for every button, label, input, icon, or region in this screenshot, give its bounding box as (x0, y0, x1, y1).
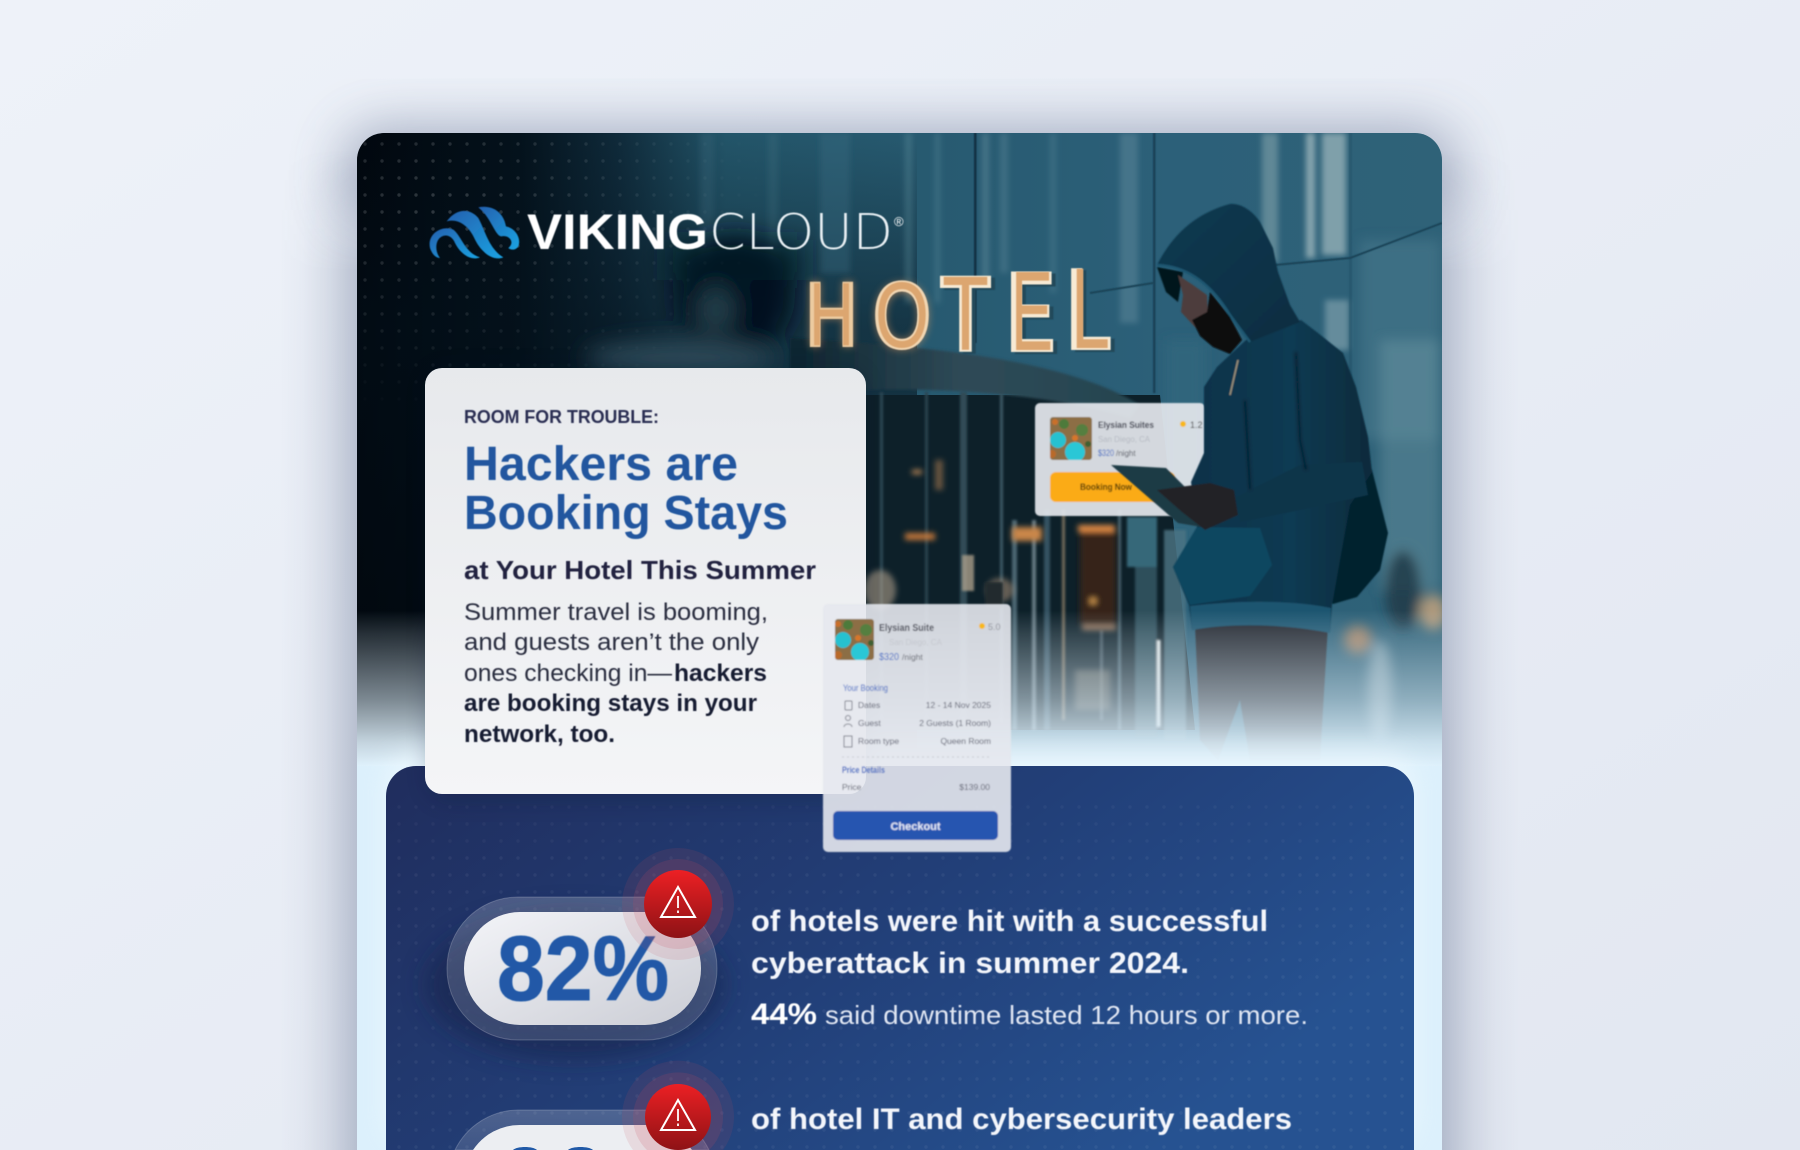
checkout booking card: 5.0 (988, 622, 1001, 632)
backpack (1332, 470, 1389, 605)
checkout booking card: Checkout (890, 821, 941, 833)
bottom fade of photo (357, 610, 1442, 766)
sign inner lines: L (1071, 245, 1110, 373)
glass facade streaks (700, 133, 1349, 350)
checkout booking card: 12 - 14 Nov 2025 (926, 700, 991, 710)
icon: alert (622, 848, 734, 960)
sign tubes: E (1006, 246, 1056, 377)
sign 3D sides (944, 270, 1115, 354)
hero photo: hotel entrance at night (357, 133, 1447, 1150)
small booking card behind hacker: Elysian Suites (1098, 420, 1154, 431)
small booking card behind hacker: $320 (1098, 448, 1114, 458)
sign 3D sides: E (1010, 248, 1060, 379)
small booking card behind hacker (1035, 403, 1205, 516)
body copy: ones checking in— (464, 660, 672, 687)
hotel thumbnail (1048, 417, 1092, 462)
stat: 82% (425, 848, 1308, 1060)
sleeve (1285, 462, 1368, 512)
neon HOTEL sign (804, 267, 1115, 355)
revolving door (864, 392, 1195, 740)
body copy: hackers (674, 660, 767, 687)
sign glow (804, 276, 934, 355)
sign tubes: H (805, 262, 858, 368)
brand logo (430, 204, 904, 261)
stat copy: of hotel IT and cybersecurity leaders (751, 1103, 1292, 1136)
checkout booking card: 2 Guests (1 Room) (919, 718, 991, 728)
legs (1194, 624, 1328, 742)
body copy (464, 599, 768, 748)
blurred passer-by silhouette (585, 233, 805, 374)
sign tubes: T (939, 253, 992, 376)
checkout booking card: $320 (879, 652, 899, 663)
wordmark: VIKING (527, 204, 708, 260)
checkout booking card: Queen Room (940, 736, 991, 746)
hooded hacker (1111, 204, 1388, 760)
card shadow: sides (280, 150, 1519, 1150)
sign inner lines: O (875, 263, 929, 367)
torso and arm (1173, 320, 1372, 632)
checkout booking card: Guest (858, 718, 881, 728)
sign glow: H (805, 261, 858, 368)
body copy: and guests aren’t the only (464, 629, 759, 656)
checkout booking card: Price (842, 782, 862, 792)
checkout booking card: /night (902, 652, 923, 662)
checkout booking card: Elysian Suite (879, 623, 934, 634)
sign tubes: L (1066, 243, 1113, 376)
dot pattern top left (363, 142, 704, 366)
stat copy (751, 905, 1308, 1031)
headline: Hackers are (464, 438, 738, 491)
small booking card behind hacker: 1.2 (1190, 420, 1203, 430)
brand logo: ® (894, 214, 904, 229)
sign tubes (809, 267, 1112, 353)
icon: alert (622, 1061, 734, 1150)
checkout booking card: Your Booking (843, 683, 888, 693)
beard (1192, 292, 1242, 354)
small booking card behind hacker: Booking Now (1080, 482, 1133, 493)
blue stats panel (384, 752, 1416, 1150)
sign tubes: O (872, 260, 932, 370)
infographic card (357, 133, 1447, 1150)
hoodie pocket and hem (1173, 527, 1272, 605)
face (1178, 275, 1208, 335)
card shadow: top (345, 128, 1454, 210)
checkout booking card: $139.00 (959, 782, 990, 792)
shadow inside hood (1157, 267, 1183, 302)
intro text card (425, 368, 866, 798)
stat: 82%: 82% (497, 918, 669, 1020)
stat copy: of hotels were hit with a successful (751, 905, 1268, 938)
small booking card behind hacker: San Diego, CA (1098, 435, 1151, 444)
sign glow: O (872, 263, 932, 370)
checkout booking card: Room type (858, 736, 899, 746)
hood (1157, 204, 1300, 342)
sign 3D sides: T (943, 255, 996, 378)
checkout button (833, 811, 998, 840)
stat copy: cyberattack in summer 2024. (751, 947, 1189, 980)
subheading: at Your Hotel This Summer (464, 555, 816, 585)
eyebrow: ROOM FOR TROUBLE: (464, 407, 659, 427)
checkout booking card: Dates (858, 700, 880, 710)
checkout booking card: Price Details (842, 765, 885, 775)
sign 3D sides: L (1070, 245, 1117, 378)
headline: Booking Stays (464, 487, 788, 540)
hotel thumbnail (834, 619, 874, 661)
sign inner lines (814, 268, 1108, 351)
drawstring (1230, 360, 1238, 395)
checkout booking card (823, 604, 1011, 852)
stat copy: said downtime lasted 12 hours or more. (825, 1000, 1308, 1030)
stat: second pill, cropped by the frame (455, 1061, 1292, 1150)
tops of the cropped number digits (513, 1147, 593, 1150)
sign inner lines: H (809, 265, 854, 365)
small booking card behind hacker: /night (1116, 449, 1136, 458)
strap and folds (1245, 352, 1306, 490)
headline (464, 438, 788, 540)
icon: cloud waves (430, 207, 519, 258)
body copy: Summer travel is booming, (464, 599, 768, 626)
checkout booking card: San Diego, CA (889, 638, 943, 647)
sign inner lines: E (1011, 248, 1053, 374)
body copy: network, too. (464, 721, 615, 748)
tablet (1111, 465, 1202, 527)
brand logo: CLOUD (709, 204, 893, 261)
sign inner lines: T (942, 255, 989, 373)
stat copy: 44% (751, 998, 817, 1031)
body copy: are booking stays in your (464, 690, 757, 717)
hand (1157, 483, 1238, 530)
canopy (790, 338, 1137, 404)
